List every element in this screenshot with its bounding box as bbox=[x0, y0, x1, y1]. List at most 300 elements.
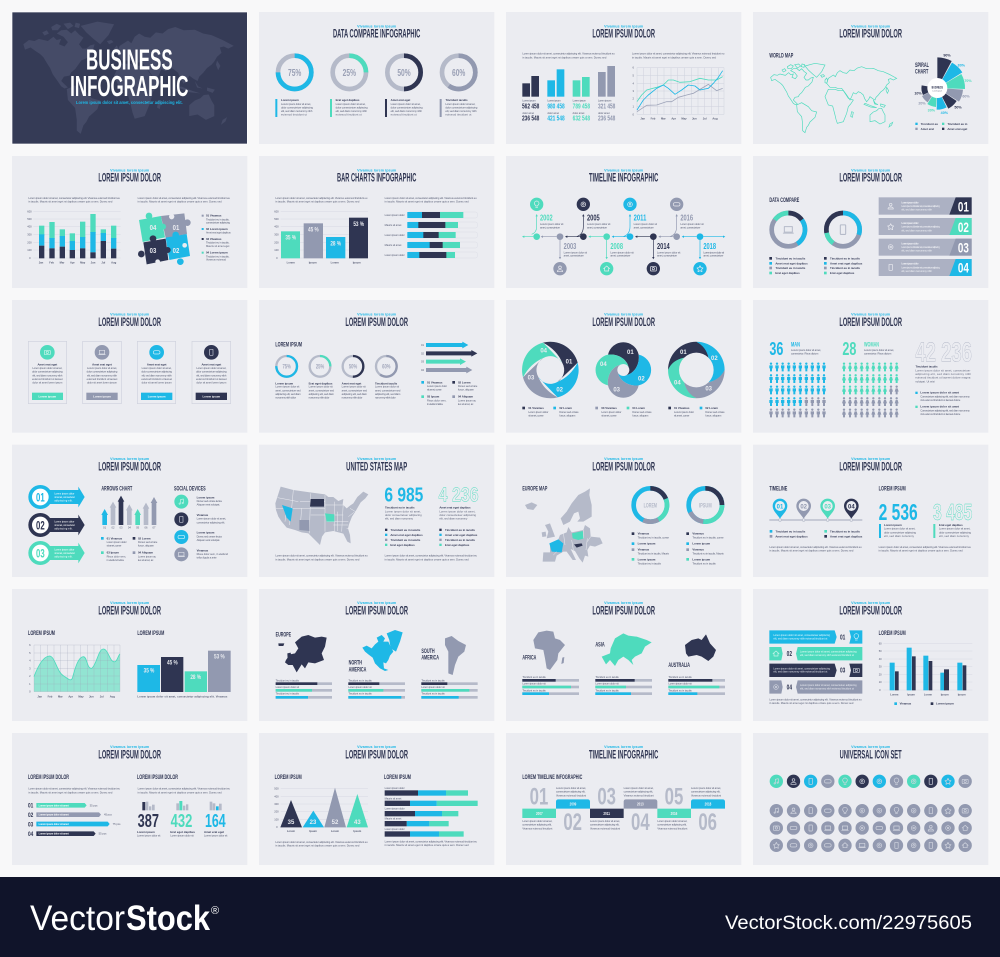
panel: swirl ring charts: LOREM IPSUM DOLOR bbox=[592, 315, 655, 329]
small donuts: 75% bbox=[282, 365, 291, 371]
heading bbox=[346, 457, 407, 473]
paragraph right: Lorem ipsum dolor sit amet, consectetur adipiscing elit. Vivamus euismod tincidunt eu bbox=[879, 545, 972, 549]
step notes bbox=[522, 786, 721, 830]
panel: bars and line chart: LOREM IPSUM DOLOR bbox=[592, 27, 655, 41]
stat 6 985 bbox=[384, 484, 423, 521]
numbered arrow 02: 02 bbox=[36, 518, 45, 532]
panel: ranked bars and figures bbox=[12, 733, 247, 865]
card 3: euismod tincidunt ut laoreet bbox=[141, 377, 172, 381]
swirl legends: Donec sed ornare bbox=[559, 410, 579, 414]
ranked bars: Lorem ipsum dolor sit amet bbox=[39, 814, 69, 817]
paragraph right: Lorem ipsum dolor sit amet, consectetur adipiscing elit. Vivamus euismod tincidunt eu bbox=[385, 554, 478, 558]
swirl chart 1: 02 bbox=[556, 387, 564, 393]
puzzle legend: Tincidunt eu in iaculis, bbox=[206, 241, 230, 245]
stacked bar chart: Feb bbox=[49, 260, 54, 264]
card 2: Lorem ipsum bbox=[93, 394, 111, 398]
stacked bar chart: Jun bbox=[91, 260, 96, 264]
stacked bar chart: 0 bbox=[29, 256, 31, 260]
swirl chart 3: 02 bbox=[711, 356, 718, 362]
paragraph left bbox=[522, 52, 615, 59]
social devices list: Donec sed ornare lectus bbox=[197, 534, 223, 538]
line chart: 1 bbox=[633, 105, 635, 109]
figures under bars: Lorem ipsum bbox=[573, 99, 587, 103]
donut with laptop icon bbox=[772, 213, 805, 246]
progress bars north america: Tincidunt eu in iaculis bbox=[348, 692, 372, 696]
puzzle legend bbox=[202, 214, 231, 262]
triangle chart: 400 bbox=[274, 794, 279, 798]
step notes: consectetuer adipiscing elit, bbox=[624, 790, 653, 794]
legend left bbox=[385, 528, 423, 547]
heading bbox=[839, 601, 902, 617]
arrows chart legend: Risus dolor sem, bbox=[107, 554, 126, 558]
panel: timeline infographic: TIMELINE INFOGRAPHIC bbox=[589, 171, 658, 185]
figure 432: Lorem ipsum dolor sit bbox=[170, 834, 194, 838]
figure 164: Lorem ipsum dolor sit bbox=[204, 834, 228, 838]
area chart: Jan bbox=[37, 694, 42, 698]
figure 164: Amet erat eget bbox=[204, 830, 224, 834]
timeline nodes bbox=[533, 233, 703, 240]
text block 1: dolor consectetuer adipiscing bbox=[281, 105, 314, 109]
card 3 bbox=[137, 341, 176, 404]
grouped bar chart bbox=[879, 641, 972, 706]
paragraph left: Lorem ipsum dolor sit amet, consectetur adipiscing elit. Vivamus euismod tincidunt eu bbox=[522, 52, 615, 56]
paragraph right bbox=[385, 196, 477, 204]
swirl legends: 01 Vivamus bbox=[674, 406, 690, 410]
paragraph right: Lorem ipsum dolor sit amet, consectetur adipiscing elit. Vivamus euismod tincidunt eu bbox=[385, 839, 478, 843]
list row 01: elit, sed diam nonummy nibh euismod tincidunt ut bbox=[773, 637, 828, 640]
arrow legend: 04 Aliquam bbox=[458, 395, 473, 399]
grouped bar chart: Lorem bbox=[890, 692, 899, 696]
step notes: consectetuer adipiscing elit, bbox=[691, 790, 721, 794]
timeline years and notes: Lorem ipsum dolor sit bbox=[703, 250, 724, 254]
step notes: consectetuer adipiscing elit, bbox=[657, 823, 687, 827]
numbered list: 04 bbox=[958, 260, 969, 276]
legend right: Tincidunt eu in iaculis bbox=[445, 538, 475, 542]
numbered arrow 03: Lorem ipsum dolor bbox=[54, 548, 75, 551]
progress bars asia: Tincidunt eu in iaculis bbox=[595, 675, 619, 679]
legend right: Erat eget dapibus bbox=[445, 543, 470, 547]
swirl chart 1 bbox=[522, 342, 579, 398]
legend left: Amet erat eget dapibus bbox=[775, 261, 808, 265]
subheading: LOREM IPSUM bbox=[879, 630, 906, 637]
donut 25%: 25% bbox=[343, 68, 356, 79]
legend right bbox=[686, 532, 724, 565]
arrows chart legend: 02 Lorem bbox=[138, 536, 151, 540]
paragraph left: in iaculis. Mauris sit amet eget mi dapibus ornare quis a sem. Donec sed bbox=[275, 844, 360, 848]
paragraph: Lorem ipsum dolor sit amet, consectetur adipiscing elit. Vivamus euismod tincidunt eu bbox=[769, 697, 862, 701]
area chart: 5 bbox=[29, 651, 31, 655]
panel: area and bars bbox=[12, 589, 247, 721]
donut notes: Lorem ipsum dolor sit bbox=[375, 385, 399, 389]
grouped bar chart: Ipsum bbox=[907, 692, 916, 696]
vectorstock logo: Stock bbox=[126, 899, 210, 938]
line chart: 6 bbox=[633, 66, 635, 70]
donut notes: Tincidunt iaculis bbox=[375, 381, 398, 385]
step notes: Lorem ipsum dolor sit amet, bbox=[657, 819, 688, 823]
grouped bar chart: Ipsum bbox=[941, 692, 949, 696]
step notes: Lorem ipsum dolor sit amet, bbox=[590, 819, 620, 823]
bar chart: 400 bbox=[274, 225, 279, 229]
donut 25% bbox=[333, 56, 366, 89]
stat 6 985: elit, sed diam nonummy bbox=[385, 517, 414, 521]
bar chart: 28 % bbox=[190, 674, 201, 681]
numbered list: Lorem ipsum dolor sit amet, consectetuer adipiscing bbox=[901, 265, 941, 269]
total stat: Tincidunt iaculis bbox=[915, 365, 938, 369]
horizontal stacked bars: Lorem ipsum dolor bbox=[385, 213, 405, 217]
arrows chart legend: 01 Vivamus bbox=[107, 536, 123, 540]
woman stat: 28 bbox=[842, 338, 856, 359]
list row 02: elit, sed diam nonummy nibh euismod tincidunt ut bbox=[800, 654, 854, 657]
numbered arrow 03: sit amet, consectetur bbox=[54, 552, 75, 555]
timeline years and notes: 2008 bbox=[610, 242, 623, 251]
timeline years and notes: amet, consectetuer bbox=[657, 254, 677, 258]
progress bars australia: Tincidunt eu in iaculis bbox=[668, 688, 692, 692]
swirl legends: sit amet, conse bbox=[674, 414, 690, 418]
heading: Vivamus lorem ipsum bbox=[110, 601, 150, 605]
paragraph right: in iaculis. Mauris sit amet eget mi dapibus ornare quis a sem. Donec sed bbox=[632, 55, 717, 59]
puzzle chart bbox=[138, 213, 191, 265]
donut notes: Amet erat eget bbox=[342, 381, 361, 385]
triangle chart: 43 bbox=[354, 820, 361, 826]
north america silhouette bbox=[349, 630, 403, 673]
donut 75%: 75% bbox=[288, 68, 301, 79]
arrow legend: Lorem ipsum dolor bbox=[427, 384, 447, 388]
card 2 bbox=[83, 341, 121, 404]
panel: europe map bbox=[506, 445, 741, 577]
subheading: DATA COMPARE bbox=[769, 197, 800, 204]
arrows chart legend bbox=[101, 536, 158, 562]
grouped bar chart: 60 bbox=[879, 641, 882, 645]
ranked bars: 45 pcs bbox=[104, 813, 112, 817]
bullet notes: Lorem ipsum dolor sit amet bbox=[920, 405, 959, 409]
puzzle legend: consectetuer adipiscing bbox=[206, 221, 231, 225]
figures under bars: Lorem ipsum bbox=[522, 99, 536, 103]
heading: Vivamus lorem ipsum bbox=[110, 313, 150, 317]
puzzle legend: Vivamus euismod bbox=[206, 258, 227, 262]
paragraph right: in iaculis. Mauris sit amet eget mi dapibus ornare quis a sem. Donec sed bbox=[385, 843, 469, 847]
heading: Vivamus lorem ipsum bbox=[357, 745, 397, 749]
numbered arrow 03 bbox=[28, 541, 85, 565]
legend left: Amet erat eget dapibus bbox=[390, 533, 423, 537]
europe silhouette bbox=[276, 632, 327, 672]
figure 432 bbox=[170, 801, 195, 838]
legend right: Lorem ipsum bbox=[692, 557, 711, 561]
australia silhouette: AUSTRALIA bbox=[668, 662, 690, 669]
card 3: Lorem ipsum dolor sit amet, bbox=[142, 366, 172, 370]
progress bars south america bbox=[421, 678, 478, 699]
spiral chart: Lorem ipsum bbox=[933, 90, 943, 92]
spiral chart: BUSINESS bbox=[932, 86, 944, 90]
stat 4 236: Amet erat eget dapibus bbox=[439, 506, 471, 510]
stacked bar chart: 500 bbox=[27, 217, 32, 221]
panel: four cards: LOREM IPSUM DOLOR bbox=[98, 315, 161, 329]
step notes: Vivamus euismod tincidunt bbox=[624, 793, 654, 797]
grouped bar chart: 30 bbox=[879, 665, 882, 669]
puzzle legend: 04 Lorem ipsum bbox=[206, 251, 228, 255]
heading bbox=[98, 457, 161, 473]
spiral chart: 80% bbox=[958, 64, 966, 68]
paragraph right bbox=[632, 52, 725, 59]
coloured icon row bbox=[770, 775, 972, 788]
donut notes: amet, consectetuer sed bbox=[309, 388, 335, 392]
card 4: elit, sed diam nonummy nibh bbox=[196, 373, 227, 377]
area chart: Apr bbox=[68, 694, 73, 698]
progress bars south america: Tincidunt eu in iaculis bbox=[421, 692, 445, 696]
swirl legends: fusce, aliquam bbox=[705, 414, 722, 418]
list row 02 bbox=[769, 647, 862, 660]
text block 4: dolor consectetuer adipiscing bbox=[445, 105, 478, 109]
subheading: LOREM TIMELINE INFOGRAPHIC bbox=[522, 774, 582, 781]
timeline years and notes: Lorem ipsum dolor sit bbox=[634, 222, 657, 226]
area chart: Jul bbox=[100, 694, 104, 698]
progress bars south america: Tincidunt eu in iaculis bbox=[421, 678, 445, 682]
paragraph left bbox=[28, 787, 121, 794]
donut notes: adipiscing elit, sed diam bbox=[309, 392, 335, 396]
numbered arrow 01: adipiscing elit. bbox=[54, 500, 73, 503]
area chart: Feb bbox=[48, 694, 53, 698]
heading bbox=[98, 601, 161, 617]
text block 3: dolor consectetuer adipiscing bbox=[391, 105, 423, 109]
arrow bars bbox=[421, 342, 477, 373]
panel: donuts and arrows bbox=[259, 300, 494, 433]
heading bbox=[839, 168, 902, 185]
paragraph right: in iaculis. Mauris sit amet eget mi dapibus ornare quis a sem. Donec sed bbox=[385, 557, 469, 561]
panel: stacked bars and puzzle bbox=[12, 156, 247, 288]
panel: timeline steps bbox=[506, 733, 741, 865]
legend right bbox=[439, 528, 478, 547]
paragraph right bbox=[879, 545, 972, 553]
numbered arrow 01: sit amet, consectetur bbox=[54, 496, 75, 499]
paragraph right: Lorem ipsum dolor sit amet, consectetur adipiscing elit. Vivamus euismod tincidunt eu bbox=[632, 52, 725, 56]
text block 3: Amet erat eget bbox=[391, 98, 410, 102]
numbered list: 02 bbox=[958, 219, 969, 235]
vectorstock logo: Vector bbox=[30, 899, 125, 938]
map label: EUROPE MAP bbox=[522, 485, 548, 492]
donut notes: Lorem ipsum dolor sit bbox=[342, 385, 366, 389]
panel: arrows chart and social devices bbox=[12, 445, 247, 577]
text block 3: elit, sed diam nonummy nibh bbox=[391, 109, 423, 113]
area chart: Jun bbox=[89, 694, 94, 698]
heading bbox=[840, 745, 902, 762]
heading: Vivamus lorem ipsum bbox=[110, 745, 150, 749]
arrow legend: leo sit amet, ac bbox=[458, 402, 474, 406]
panel: man and woman people chart bbox=[753, 300, 988, 433]
card 4: dolor sit amet lorem ipsum bbox=[196, 381, 227, 385]
panel: pin timeline and stats: LOREM IPSUM DOLOR bbox=[839, 459, 902, 473]
spiral chart: 40% bbox=[941, 111, 949, 115]
heading bbox=[839, 24, 902, 41]
figures under bars: dolor amet bbox=[598, 111, 610, 115]
timeline years and notes: Lorem ipsum dolor sit bbox=[680, 222, 704, 226]
man stat: consectetur. Risus dictum bbox=[791, 352, 819, 356]
triangle chart: 52 bbox=[332, 820, 339, 826]
triangle chart: 100 bbox=[274, 817, 279, 821]
big step numbers: 01 bbox=[530, 784, 548, 811]
social devices list: Lorem ipsum bbox=[197, 531, 215, 535]
panel: list and grouped bars bbox=[753, 589, 988, 721]
image id: VectorStock.com/22975605 bbox=[725, 912, 972, 934]
swirl chart 3: 04 bbox=[674, 380, 681, 386]
puzzle legend: Tincidunt eu in iaculis, bbox=[206, 217, 230, 221]
paragraph left bbox=[275, 554, 368, 561]
figures under bars: 421 548 bbox=[547, 114, 565, 123]
area chart: 4 bbox=[29, 659, 31, 663]
paragraph left: Lorem ipsum dolor sit amet, consectetur adipiscing elit. Vivamus euismod tincidunt eu bbox=[28, 196, 121, 200]
bar chart: 45 % bbox=[167, 660, 178, 667]
swirl chart 3 bbox=[662, 335, 731, 405]
line chart: 4 bbox=[633, 81, 635, 85]
asia silhouette: ASIA bbox=[595, 641, 605, 648]
stacked bar chart: 300 bbox=[27, 233, 32, 237]
legend right: Amet erat eget dapibus bbox=[830, 261, 863, 265]
swirl legends: Lorem ipsum dolor bbox=[674, 410, 694, 414]
line chart: 5 bbox=[633, 73, 635, 77]
numbered arrow 02: Lorem ipsum dolor bbox=[54, 520, 75, 523]
progress bars europe: Lorem ipsum dolor sit bbox=[276, 685, 299, 689]
arrow bars: 02 bbox=[421, 351, 424, 355]
paired bars bbox=[522, 66, 615, 97]
step blocks: 2013 bbox=[637, 802, 644, 807]
step notes: Lorem ipsum dolor sit amet, bbox=[691, 786, 721, 790]
panel: data compare with numbered list: LOREM IPSUM DOLOR bbox=[839, 171, 902, 185]
swirl chart 2: 03 bbox=[613, 388, 621, 394]
figure 387: Lorem ipsum dolor sit bbox=[137, 834, 161, 838]
numbered list: Lorem ipsum dolor bbox=[901, 221, 919, 225]
legend left: Lorem ipsum bbox=[638, 542, 656, 546]
panel: united states map: UNITED STATES MAP bbox=[346, 459, 407, 473]
panel: data compare with numbered list bbox=[753, 156, 988, 288]
map pins timeline: 03 bbox=[824, 504, 832, 510]
heading bbox=[345, 313, 408, 329]
grouped bar chart: Lorem bbox=[924, 692, 933, 696]
grey icon row 2 bbox=[770, 821, 972, 835]
triangle chart: 200 bbox=[274, 810, 279, 814]
big step numbers: 05 bbox=[665, 784, 683, 811]
text block 3: euismod tincidunt ut bbox=[391, 113, 417, 117]
progress bars asia: Tincidunt eu in iaculis bbox=[595, 688, 619, 692]
vectorstock logo: ® bbox=[211, 905, 219, 917]
spiral chart: 10% bbox=[914, 91, 922, 95]
timeline years and notes: 2002 bbox=[540, 214, 553, 223]
europe map bbox=[525, 488, 603, 563]
figures under bars: 789 458 bbox=[573, 102, 590, 111]
line chart: May bbox=[681, 117, 687, 121]
heading bbox=[839, 457, 902, 473]
step notes: Vivamus euismod tincidunt bbox=[590, 826, 620, 830]
bar chart: 600 bbox=[274, 209, 279, 213]
swirl chart 1: 04 bbox=[540, 348, 548, 354]
figures under bars: 980 458 bbox=[547, 102, 565, 111]
card 4: Lorem ipsum dolor sit amet, bbox=[196, 366, 227, 370]
heading: Vivamus lorem ipsum bbox=[604, 24, 644, 28]
text block 4: euismod tincidunt ut bbox=[445, 113, 472, 117]
legend left: Lorem ipsum bbox=[638, 557, 656, 561]
panel: bar charts infographic: BAR CHARTS INFOGRAPHIC bbox=[337, 171, 416, 185]
australia silhouette bbox=[668, 634, 716, 669]
puzzle chart: 04 bbox=[150, 223, 157, 232]
paragraph left bbox=[28, 196, 121, 204]
bar chart bbox=[137, 651, 231, 699]
total stat bbox=[915, 337, 972, 383]
bar chart: Lorem bbox=[287, 260, 295, 264]
stacked lines chart bbox=[385, 786, 478, 837]
numbered arrow 01: Lorem ipsum dolor bbox=[54, 492, 75, 495]
step notes: Lorem ipsum dolor sit amet, bbox=[522, 819, 553, 823]
puzzle legend: 03 Vivamus bbox=[206, 237, 222, 241]
legend left: Erat eget dapibus bbox=[775, 271, 800, 275]
pins legend: Amet erat eget dapibus bbox=[775, 534, 808, 538]
progress bars africa: Lorem ipsum dolor sit bbox=[522, 682, 546, 686]
spiral chart bbox=[914, 54, 972, 115]
heading bbox=[592, 24, 655, 41]
puzzle legend: Amet erat eget dapibus bbox=[206, 231, 231, 235]
timeline icons bbox=[530, 198, 707, 275]
spiral chart: 70% bbox=[964, 79, 972, 83]
card 2: dolor consectetuer adipiscing bbox=[87, 370, 118, 374]
line chart: Jun bbox=[692, 117, 697, 121]
timeline years and notes: 2018 bbox=[703, 242, 716, 251]
bullet notes: Lorem ipsum dolor sit amet bbox=[920, 391, 959, 395]
social devices list: Lorem ipsum dolor sit amet, bbox=[197, 517, 226, 521]
timeline years and notes: Lorem ipsum dolor sit bbox=[587, 222, 611, 226]
figure 387 bbox=[137, 802, 161, 838]
line chart: 0 bbox=[633, 112, 635, 116]
cover subtitle: Lorem ipsum dolor sit amet, consectetur adipiscing elit. bbox=[76, 100, 183, 105]
ranked bars: Lorem ipsum dolor sit amet bbox=[39, 804, 69, 807]
heading: Vivamus lorem ipsum bbox=[851, 457, 891, 461]
north america silhouette: NORTH bbox=[349, 660, 362, 667]
subheading left: LOREM IPSUM bbox=[28, 630, 55, 637]
numbered list: elit, sed diam nonummy nibh bbox=[901, 269, 933, 273]
timeline years and notes: Lorem ipsum dolor sit bbox=[540, 222, 564, 226]
swirl legends: Lorem ipsum dolor bbox=[528, 410, 548, 414]
panel: triangle chart and stacked lines: LOREM IPSUM DOLOR bbox=[345, 747, 408, 761]
figures under bars: 321 458 bbox=[598, 102, 615, 111]
card 1: Amet erat eget bbox=[38, 363, 57, 367]
bar chart: 45 % bbox=[308, 226, 319, 233]
arrows chart legend: Donec sed ornare bbox=[138, 540, 158, 544]
donut notes: adipiscing elit, sed diam bbox=[342, 392, 368, 396]
stat 2 536: Lorem ipsum dolor sit amet, bbox=[884, 527, 916, 531]
area chart bbox=[29, 643, 120, 698]
panel: ranked bars and figures: LOREM IPSUM DOLOR bbox=[98, 747, 161, 761]
stacked bar chart: 200 bbox=[27, 240, 32, 244]
card 1: dolor consectetuer adipiscing bbox=[32, 370, 63, 374]
stat 3 485: Erat eget dapibus bbox=[939, 523, 963, 527]
paragraph left: in iaculis. Mauris sit amet eget mi dapibus ornare quis a sem. Donec sed bbox=[275, 200, 360, 204]
paragraph left: Lorem ipsum dolor sit amet, consectetur adipiscing elit. Vivamus euismod tincidunt eu bbox=[275, 840, 368, 844]
stat 6 985: Tincidunt eu in iaculis bbox=[385, 506, 415, 510]
bullet notes: Consectetuer adipiscing elit, sed diam nonummy bbox=[920, 394, 970, 398]
numbered list: 01 bbox=[958, 198, 969, 214]
card 4: Amet erat eget bbox=[202, 363, 221, 367]
puzzle legend: Tincidunt eu in iaculis, bbox=[206, 254, 230, 258]
grouped bar chart: 40 bbox=[879, 657, 882, 661]
panel: stacked bars and puzzle: LOREM IPSUM DOLOR bbox=[98, 171, 161, 185]
paragraph right: in iaculis. Mauris sit amet eget mi dapibus ornare quis a sem. Donec sed bbox=[879, 549, 963, 553]
swirl legends: 04 Lorem bbox=[632, 406, 645, 410]
card 4: Lorem ipsum bbox=[202, 394, 221, 398]
panel: bar charts infographic bbox=[259, 156, 494, 288]
panel: timeline infographic bbox=[506, 156, 741, 288]
panel: timeline steps: TIMELINE INFOGRAPHIC bbox=[589, 747, 658, 761]
step notes: Vivamus euismod tincidunt bbox=[657, 826, 688, 830]
grouped bar chart: 0 bbox=[879, 688, 881, 692]
bar chart: Ipsum bbox=[309, 260, 317, 264]
puzzle chart: 03 bbox=[150, 246, 156, 255]
triangle chart: 300 bbox=[274, 802, 279, 806]
figure 164: 164 bbox=[205, 810, 226, 831]
